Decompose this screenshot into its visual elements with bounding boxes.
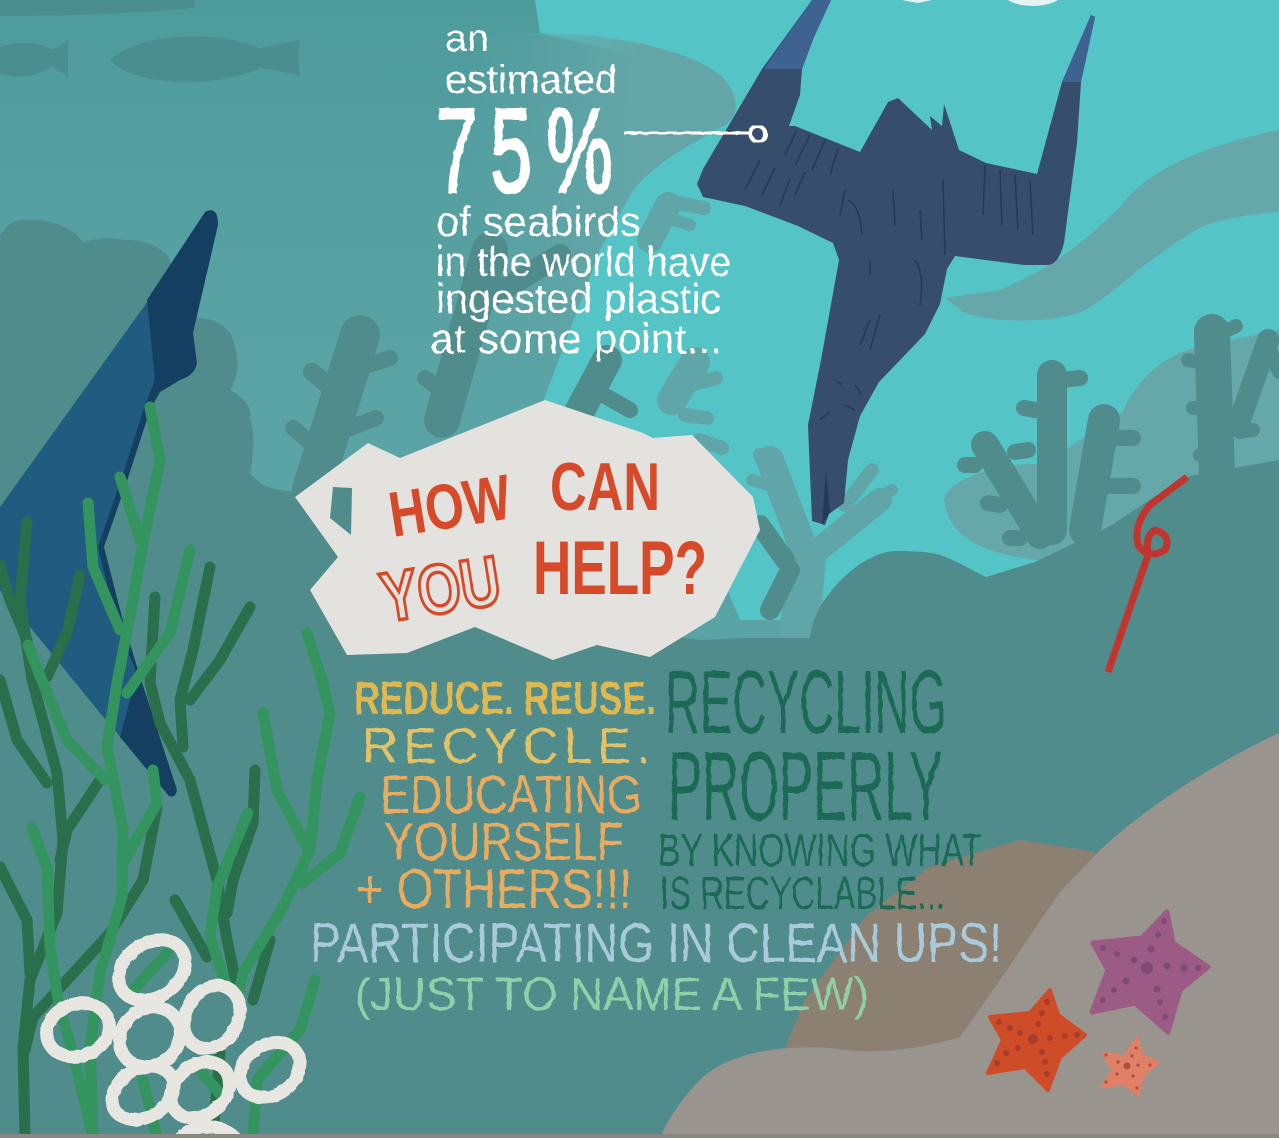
recycling properly text: PROPERLY [668, 731, 943, 841]
grey boulders [660, 733, 1279, 1138]
starfish group [988, 912, 1208, 1095]
dark coral silhouettes [293, 250, 1279, 610]
educating yourself text: EDUCATING [380, 765, 642, 825]
light coral silhouettes [650, 202, 892, 630]
small coral starfish [1102, 1038, 1158, 1095]
heading: how can you help: HOW [384, 461, 516, 551]
seaweed [0, 407, 360, 1137]
statistic text [430, 18, 731, 362]
light background patches [944, 330, 1279, 560]
tips text [310, 653, 1002, 1020]
whale fin [0, 210, 218, 797]
orange starfish [988, 990, 1085, 1090]
recycling properly text: IS RECYCLABLE... [660, 867, 945, 919]
just to name a few text: (JUST TO NAME A FEW) [355, 968, 869, 1020]
educating yourself text: + OTHERS!!! [356, 857, 632, 920]
statistic text: at some point... [430, 315, 722, 362]
purple starfish [1092, 912, 1208, 1032]
statistic text: an [445, 18, 489, 60]
red plastic straw [1108, 477, 1187, 672]
recycling properly text: BY KNOWING WHAT [658, 824, 982, 876]
statistic text: 75% [436, 85, 613, 218]
statistic text: ingested plastic [436, 275, 721, 322]
recycling properly text [658, 653, 982, 919]
educating yourself text [356, 765, 642, 920]
heading: how can you help: HELP? [533, 526, 707, 611]
reduce reuse recycle text [354, 672, 656, 774]
plastic six-pack rings [39, 927, 311, 1138]
statistic text: estimated [445, 58, 617, 102]
heading: how can you help: CAN [550, 449, 660, 525]
participating in clean ups text: PARTICIPATING IN CLEAN UPS! [310, 911, 1002, 974]
educating yourself text: YOURSELF [384, 812, 624, 872]
statistic text: of seabirds [436, 198, 641, 245]
statistic text: in the world have [436, 238, 731, 285]
seabird diving [697, 0, 1095, 525]
bottom strip [0, 1134, 1279, 1138]
heading: how can you help [375, 449, 707, 637]
reduce reuse recycle text: REDUCE. REUSE. [354, 672, 656, 724]
recycling properly text: RECYCLING [665, 653, 947, 753]
heading: how can you help: YOU [375, 541, 506, 637]
light swoosh [945, 130, 1279, 321]
brown rock [780, 840, 1097, 1060]
reduce reuse recycle text: RECYCLE. [362, 718, 650, 774]
background fish silhouettes [0, 0, 300, 82]
callout line [624, 126, 766, 142]
plastic bottle banner [295, 400, 760, 660]
white shape at top edge [902, 0, 1058, 6]
